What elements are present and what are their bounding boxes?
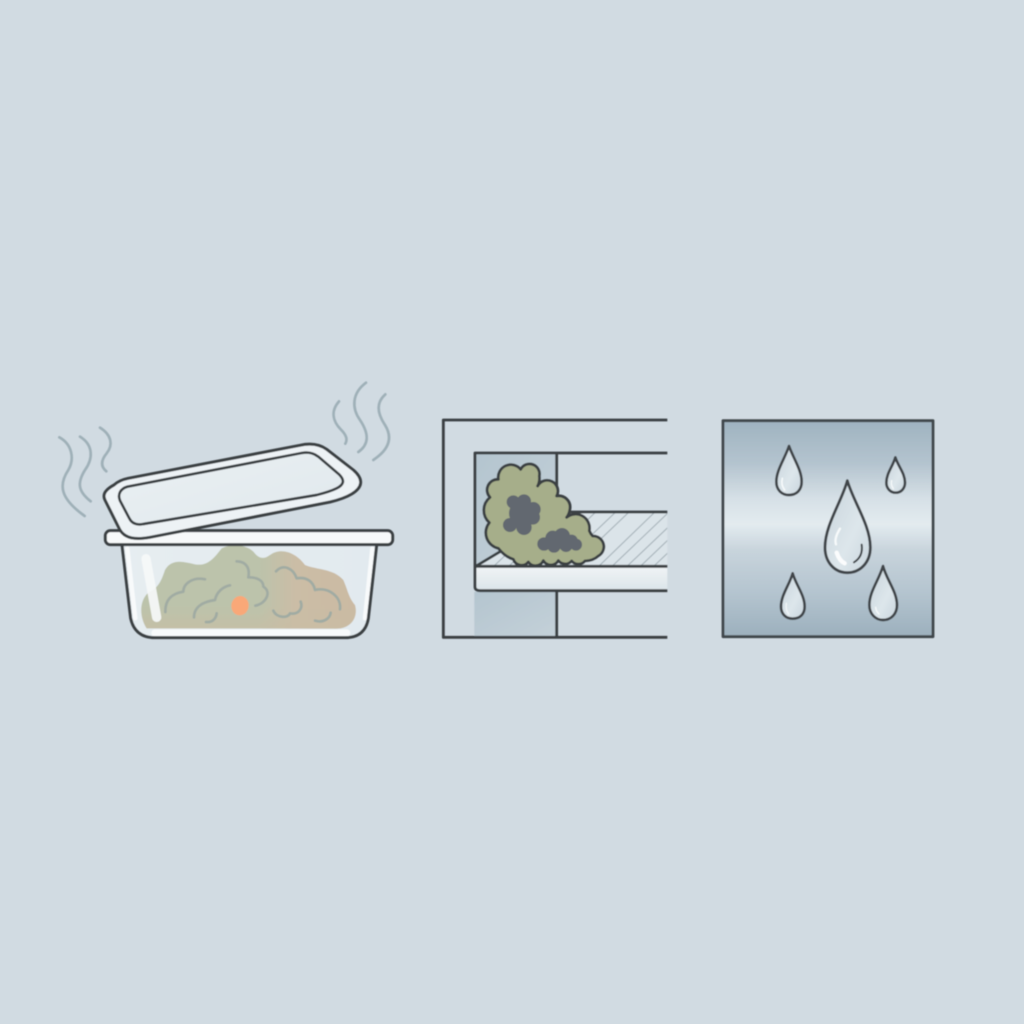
panel: refrigerator shelf with mold [441, 418, 668, 640]
dark mold spot: small [537, 528, 582, 553]
panel: condensation on steel [723, 421, 933, 637]
droplet: bottom left [781, 573, 805, 619]
droplet: top left [776, 446, 802, 495]
odor lines: right [334, 383, 389, 460]
container outline [122, 545, 377, 638]
shelf front [476, 567, 667, 591]
fridge wall shadow upper [475, 453, 557, 567]
hatched shelf surface [477, 500, 737, 567]
fridge wall shadow lower [474, 592, 557, 637]
lid inner panel [119, 453, 343, 524]
mold colony [484, 464, 604, 566]
spoiled food [141, 545, 356, 629]
food texture squiggles [165, 561, 340, 622]
odor lines: left [59, 428, 111, 516]
glass highlights [146, 559, 157, 617]
droplet: bottom right [869, 566, 897, 620]
container rim [105, 531, 393, 545]
container body glass [122, 545, 377, 638]
panel: food container with lid ajar [59, 383, 393, 638]
orange spot [230, 595, 250, 617]
steel plate [723, 421, 933, 637]
dark mold spot: large [503, 494, 541, 535]
droplet: large center [825, 481, 870, 573]
droplet: top right [886, 457, 905, 493]
fridge outlines [443, 420, 667, 637]
lid [104, 444, 361, 539]
